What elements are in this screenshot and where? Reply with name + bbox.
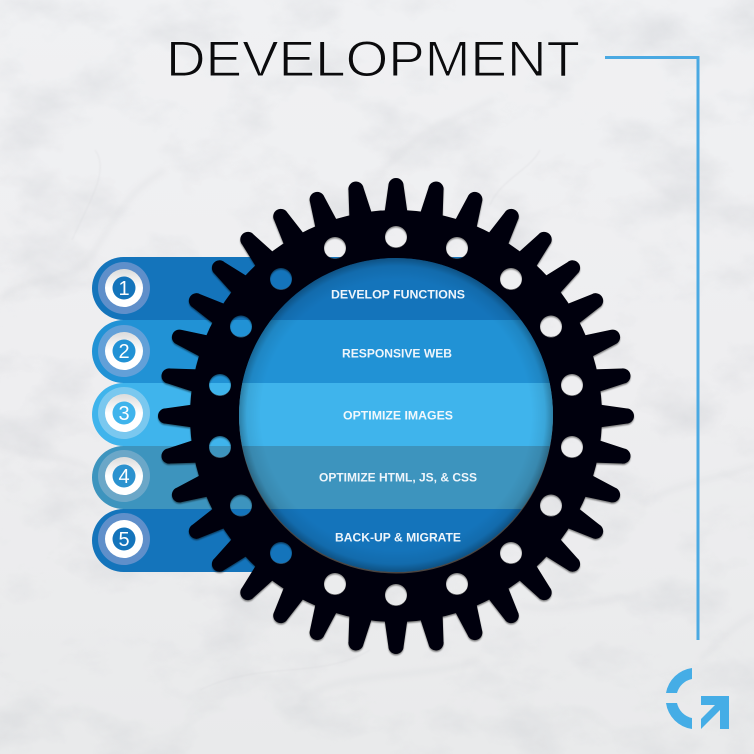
number badge 3: 3 xyxy=(118,403,130,425)
number badge 3 xyxy=(98,387,150,439)
central disc xyxy=(230,250,560,579)
label: back-up and migrate: BACK-UP & MIGRATE xyxy=(335,530,461,544)
band 4 xyxy=(92,446,480,509)
label: optimize images: OPTIMIZE IMAGES xyxy=(343,408,453,422)
number badge 2: 2 xyxy=(118,341,130,363)
number badge 4: 4 xyxy=(118,466,130,488)
number badge 4 xyxy=(98,450,150,502)
gear hole shadows xyxy=(210,242,582,606)
band 2 xyxy=(92,320,480,383)
number badge 5 xyxy=(98,513,150,565)
band 3 xyxy=(92,383,480,446)
band 1 xyxy=(92,257,480,320)
title: DEVELOPMENT xyxy=(166,31,580,87)
label: optimize html js css: OPTIMIZE HTML, JS, & CSS xyxy=(319,470,477,484)
gear xyxy=(158,178,634,654)
number badge 5: 5 xyxy=(118,529,130,551)
label: responsive web: RESPONSIVE WEB xyxy=(342,346,452,360)
label: develop functions: DEVELOP FUNCTIONS xyxy=(331,288,465,302)
band 5 xyxy=(92,509,480,572)
number badge 2 xyxy=(98,325,150,377)
number badge 1: 1 xyxy=(118,278,130,300)
number badge 1 xyxy=(98,262,150,314)
colored bands behind gear xyxy=(92,257,480,572)
logo: G arrow xyxy=(666,668,729,729)
connector line xyxy=(605,58,698,640)
